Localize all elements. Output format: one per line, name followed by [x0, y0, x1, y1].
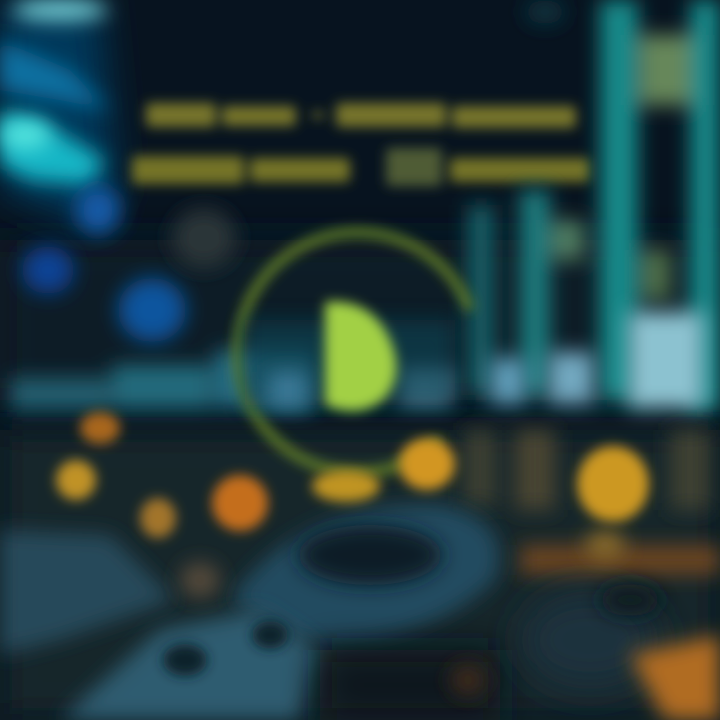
icons: glowing orange lights — [56, 412, 720, 720]
bar chart: teal columns — [400, 0, 720, 410]
heading: blurred title, first line — [146, 103, 576, 128]
chart: blurred low bars at left — [10, 350, 315, 410]
donut chart: green ring with pie slice — [238, 233, 470, 473]
panel: lower gauges and machinery — [0, 430, 720, 720]
heading: blurred title, second line — [132, 148, 590, 186]
panel: left blue glow lights — [0, 0, 565, 342]
